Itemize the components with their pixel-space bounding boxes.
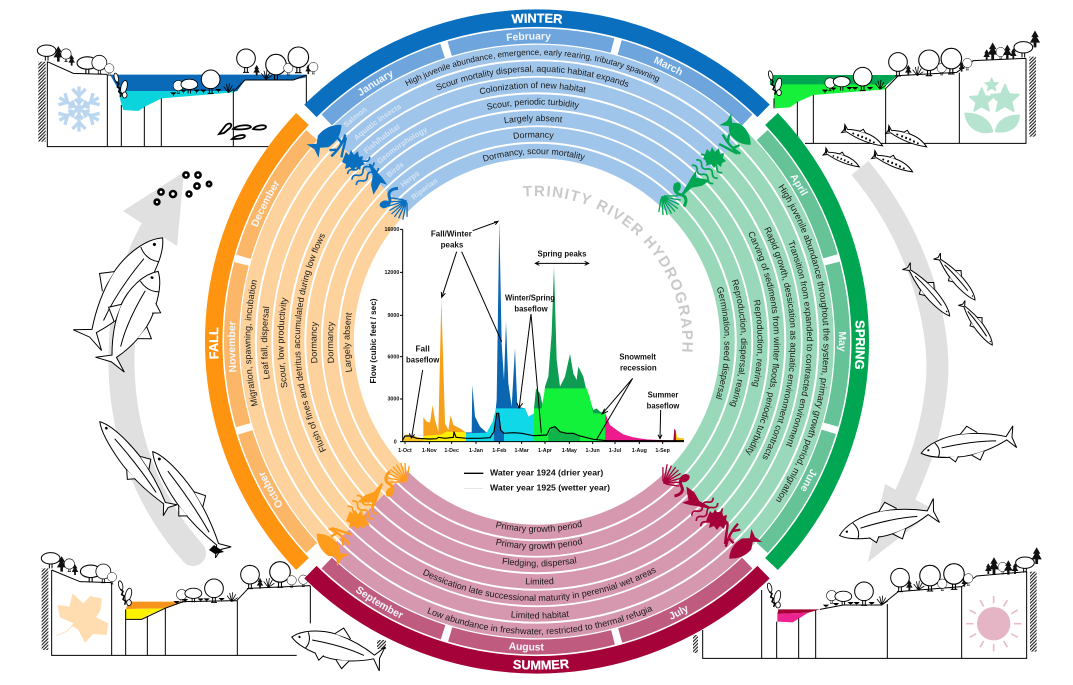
ring category labels: Birds [385,160,406,179]
data rings: fall [248,137,402,546]
x axis ticks: 1-Aug [632,448,647,454]
summer ring text: Fledging, dispersal [501,555,577,569]
wheel: summer section [310,476,764,665]
summer ring text: Dessication late successional maturity in perennial wet areas [423,568,656,602]
x axis ticks: 1-Jun [586,448,600,454]
months band: September [327,563,443,632]
winter flow areas [466,220,534,442]
grey arrow: spring migration downstream [860,168,937,562]
annotation text: Summer [648,391,678,400]
annotation text: Spring peaks [537,250,587,259]
y axis ticks: 9000 [387,313,399,319]
annotation text: baseflow [406,355,440,364]
data rings: winter [332,52,742,207]
summer ring text: Primary growth period [495,519,583,534]
x axis ticks: 1-May [562,448,577,454]
annotation arrows [409,221,662,439]
fall flow areas [403,298,466,442]
ring category labels: Salmon [341,104,369,129]
annotation text: baseflow [647,402,680,411]
month labels [186,32,888,656]
panel: fall river cross-section [41,553,310,655]
fall ring text: Largely absent [343,312,352,372]
winter ring text: Scour, periodic turbidity [487,98,580,110]
summer water levels [777,609,820,622]
fall ring text: Dormancy [311,322,319,363]
annotation text: Fall/Winter [431,229,472,238]
ring category labels: Riparian [409,175,440,202]
winter ring text: Dormancy [514,132,554,140]
month labels: March [654,56,682,76]
y axis ticks: 3000 [387,397,399,403]
y axis ticks: 6000 [387,354,399,360]
fall ring text: Migration, spawning, incubation [244,280,258,406]
annotation text: peaks [441,241,464,250]
ring category labels: Aquatic insects [351,101,404,143]
month labels: August [508,642,544,652]
fall ring text: Leaf fall, dispersal [260,306,270,380]
x axis ticks: 1-Sep [655,448,671,454]
data rings: summer [332,476,742,631]
season band: summer [310,572,764,665]
x axis ticks: 1-Nov [422,448,437,454]
icons: fall diagonal (orange) [311,458,416,566]
data rings: spring [672,137,826,546]
season band: spring [772,119,860,564]
y axis title: Flow (cubic feet / sec) [369,298,378,384]
months band: July [620,563,747,636]
month labels: November [228,321,236,372]
icon: snowflake [56,86,102,132]
fish: outmigrating smolts [900,250,999,349]
winter ring text: Colonization of new habitat [480,82,586,94]
season headings [166,14,908,670]
spring water levels [770,75,898,108]
season headings: WINTER [511,14,562,24]
legend: Water year 1924 (drier year) [490,468,604,477]
winter water levels [110,75,307,111]
annotation text: recession [620,363,657,372]
fall ring text: Scour, low productivity [277,297,288,388]
spring ring text: High juvenile abundance throughout the system, primary growth period, migration [776,184,830,502]
months band: February [450,36,612,49]
months band: January [327,51,443,120]
icons: winter diagonal (blue) [306,118,415,223]
fish: winter fry [219,124,266,139]
water year 1925 line [403,435,423,437]
months band: November [231,264,243,425]
icons: summer diagonal (maroon) [655,461,762,565]
annotation text [406,229,680,411]
month labels: May [836,332,846,352]
spring flow areas [534,267,605,442]
legend: Water year 1925 (wetter year) [490,483,610,492]
x axis ticks: 1-Feb [492,448,507,454]
fish: ocean adults [287,418,1018,677]
month labels: June [801,469,817,492]
wheel: spring section [672,119,860,564]
fish: spawning adults [63,220,184,376]
month labels: July [670,606,688,620]
icons: spring diagonal (green) [652,113,757,220]
spring ring text: Transition from expanded to contracted environment [786,240,814,448]
season band: fall [214,119,302,564]
salmon eggs [155,172,211,204]
icon: sun [966,596,1021,651]
summer ring text: Primary growth period [495,536,583,551]
months band: May [831,264,843,425]
x axis ticks: 1-Jul [609,448,622,454]
annotation text: Fall [415,344,430,353]
fall ring text: Dormancy [328,322,336,363]
arc title: TRINITY RIVER HYDROGRAPH [515,143,735,362]
hydrograph chart [385,220,684,492]
icon: flowers and leaves [965,78,1019,133]
season headings: SUMMER [513,659,570,670]
grey arrow: fall migration upstream [121,172,193,553]
season headings: FALL [209,328,219,359]
month labels: October [259,472,282,508]
summer flow areas [605,413,684,442]
spring ring text [716,184,830,502]
wheel: winter section [310,18,764,207]
panel: summer river cross-section [703,547,1042,658]
panel: winter river cross-section [37,45,318,147]
winter ring text: High juvenile abundance, emergence, early rearing, tributary spawning [405,50,660,86]
y axis ticks [385,227,399,445]
y axis ticks: 12000 [385,270,399,276]
spring ring text: Rapid growth, dessication as aquatic environment contracts [762,226,796,460]
winter ring text: Dormancy, scour mortality [482,149,585,162]
month labels: January [358,70,392,96]
season band: winter [310,18,764,111]
fall ring text [244,234,352,452]
winter ring text [405,50,660,162]
axes [400,229,684,444]
months band: December [244,135,312,257]
months band: April [762,135,830,256]
icon: autumn leaf [56,593,108,643]
season headings: SPRING [854,320,865,369]
spring ring text: Carving of sediments from winter floods, periodic turbidity [746,232,780,456]
x axis ticks [398,448,671,454]
legend [464,468,610,492]
month labels: December [251,180,279,227]
month labels: February [506,32,551,42]
x axis ticks: 1-Jan [469,448,483,454]
y axis ticks: 0 [394,439,397,445]
ring category labels: Herps [398,168,421,189]
spring ring text: Germination, seed dispersal [716,287,730,400]
x axis ticks: 1-Mar [515,448,529,454]
x axis ticks: 1-Oct [398,448,412,454]
summer ring text: Low abundance in freshwater, restricted to thermal refugia [428,606,653,636]
months band: October [245,432,312,548]
annotation text: Snowmelt [619,352,656,361]
summer ring text [423,520,656,636]
winter ring text: Largely absent [504,114,562,124]
wheel: fall section [214,119,402,564]
months band: June [762,432,829,548]
x axis ticks: 1-Apr [538,448,552,454]
months band: August [450,634,613,647]
fall ring text: Flush of fines and detritus accumulated during low flows [294,234,326,452]
months band: March [620,47,747,120]
ring category labels: Geomorphology [374,123,430,166]
summer ring text: Limited [525,576,554,587]
month labels: September [356,586,404,618]
annotation text: Winter/Spring [505,293,555,302]
water year 1924 line [403,413,684,441]
y axis ticks: 16000 [385,227,399,233]
panel: spring river cross-section [768,31,1040,143]
ring category labels [344,105,438,200]
fish: spring juveniles [823,122,930,175]
fall water levels [126,602,183,619]
winter ring text: Scour mortality dispersal, aquatic habitat expands [436,65,629,90]
spring ring text: Reproduction, rearing [752,300,764,387]
summer ring text: Limited habitat [511,610,569,619]
annotation text: baseflow [514,305,548,314]
fish: kelts [89,412,238,561]
x axis ticks: 1-Dec [444,448,459,454]
ring category labels: Fish/habitat [361,121,403,156]
spring ring text: Reproduction, dispersal, rearing [730,279,748,407]
month labels: April [790,175,808,196]
